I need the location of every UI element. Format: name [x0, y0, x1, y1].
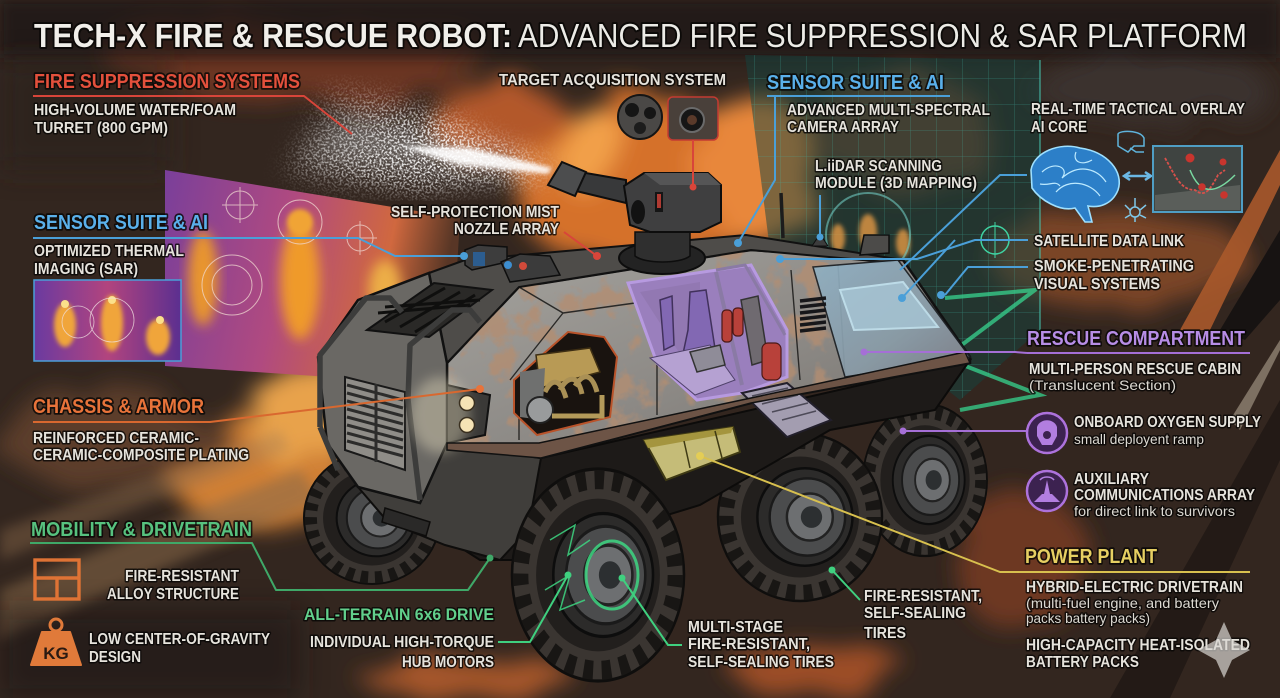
text: multi-stage tires: FIRE-RESISTANT, — [688, 636, 810, 653]
text: comms: COMMUNICATIONS ARRAY — [1074, 487, 1256, 504]
icon: oxygen mask — [1027, 413, 1067, 453]
text: water foam turret: HIGH-VOLUME WATER/FOAM — [34, 102, 236, 119]
vehicle illustration — [304, 162, 987, 681]
callout: multi-stage tires — [618, 574, 834, 671]
battery packs — [644, 427, 740, 480]
callout: fire suppression systems — [33, 71, 352, 137]
text: hybrid drivetrain: HYBRID-ELECTRIC DRIVETRAIN — [1026, 579, 1243, 596]
text: tactical overlay: REAL-TIME TACTICAL OVERLAY — [1031, 101, 1246, 118]
leader line: rescue — [860, 348, 1250, 356]
text: low center of gravity: DESIGN — [89, 649, 141, 666]
text: plating — [33, 430, 249, 464]
label: smoke-penetrating: VISUAL SYSTEMS — [1034, 276, 1160, 293]
heading: mobility: MOBILITY & DRIVETRAIN — [31, 519, 252, 541]
text: comms — [1074, 471, 1256, 519]
windshield — [840, 282, 938, 330]
translucent blue section — [813, 260, 970, 377]
suspension springs — [555, 390, 882, 500]
roof — [429, 235, 903, 363]
text: multi-stage tires: SELF-SEALING TIRES — [688, 654, 834, 671]
text: self-sealing tires: TIRES — [864, 625, 906, 642]
leader line: multi-stage — [618, 574, 682, 645]
callout: self-protection mist — [391, 204, 601, 260]
thermal image inset — [34, 280, 181, 361]
turret base — [619, 232, 705, 274]
label: target acquisition: TARGET ACQUISITION SYSTEM — [499, 72, 726, 89]
text: thermal imaging: IMAGING (SAR) — [34, 261, 138, 278]
text: alloy structure — [107, 568, 239, 603]
heading: power plant: POWER PLANT — [1025, 546, 1157, 568]
callout: mobility and drivetrain — [30, 519, 494, 666]
text: hub motors: HUB MOTORS — [402, 654, 494, 671]
text: comms: AUXILIARY — [1074, 471, 1150, 488]
side armor panel — [447, 250, 970, 458]
icon: alloy frame — [35, 560, 79, 599]
text: plating: REINFORCED CERAMIC- — [33, 430, 199, 447]
tactical map panel — [1153, 146, 1242, 212]
sill band — [447, 352, 970, 458]
label: smoke-penetrating: SMOKE-PENETRATING — [1034, 258, 1194, 275]
wheel: rear right — [863, 404, 987, 556]
leader line: tires — [828, 566, 860, 600]
callout: AI core — [900, 101, 1246, 270]
thermal imaging hologram panel — [165, 170, 460, 385]
roll cage bars — [320, 298, 480, 500]
icon: comms array — [1027, 471, 1067, 511]
heading: fire suppression: FIRE SUPPRESSION SYSTEMS — [34, 71, 300, 93]
text: thermal imaging — [34, 243, 184, 278]
icon: round camera — [618, 95, 662, 139]
leader lines: blue sensors — [776, 240, 1028, 302]
leader line: target — [690, 140, 696, 190]
leader line: thermal — [33, 238, 468, 260]
headlights — [460, 396, 474, 432]
leader line: fire suppression — [33, 96, 352, 134]
leader line: sensor suite — [734, 96, 950, 247]
text: lidar: L.iiDAR SCANNING — [815, 158, 942, 175]
leader line: chassis — [33, 385, 484, 422]
heading: chassis: CHASSIS & ARMOR — [33, 396, 204, 418]
callout: chassis and armor — [33, 385, 484, 464]
text: low center of gravity — [89, 631, 271, 666]
text: battery packs: BATTERY PACKS — [1026, 654, 1139, 671]
spray: water jet from turret — [285, 85, 552, 190]
label: all-terrain: ALL-TERRAIN 6x6 DRIVE — [304, 605, 494, 624]
front face — [318, 273, 447, 503]
text: tactical overlay — [1031, 101, 1246, 136]
roof vent louvres — [367, 283, 492, 337]
text: comms: for direct link to survivors — [1074, 503, 1235, 519]
text: hub motors: INDIVIDUAL HIGH-TORQUE — [310, 634, 494, 651]
text: rescue cabin: (Translucent Section) — [1029, 377, 1176, 393]
heading: sensor suite: SENSOR SUITE & AI — [34, 212, 208, 234]
text: battery packs: HIGH-CAPACITY HEAT-ISOLATED — [1026, 637, 1250, 654]
arrow: brain to map — [1124, 172, 1151, 180]
holographic grid panel right — [745, 55, 1040, 410]
callout: power plant — [696, 452, 1250, 671]
text: camera array — [787, 102, 990, 136]
leader line: power plant — [696, 452, 1250, 572]
wheel: rear left — [304, 452, 440, 584]
text: multi-stage tires: MULTI-STAGE — [688, 619, 783, 636]
wheel: middle — [718, 433, 882, 601]
rust texture — [447, 250, 840, 458]
text: water foam turret: TURRET (800 GPM) — [34, 120, 168, 137]
text: alloy structure: ALLOY STRUCTURE — [107, 586, 239, 603]
wheel: front — [512, 469, 684, 681]
text: thermal imaging: OPTIMIZED THERMAL — [34, 243, 184, 260]
side vent — [800, 298, 826, 331]
title — [34, 17, 1247, 54]
deployment ramp — [742, 383, 831, 437]
leader line: wheel to oxygen — [900, 428, 1026, 434]
leader line: mobility — [30, 543, 494, 590]
underbody — [370, 360, 970, 560]
title: TECH-X FIRE & RESCUE ROBOT: — [34, 17, 512, 54]
text: self-sealing tires — [864, 588, 982, 642]
turret barrel — [548, 162, 626, 203]
text: camera array: CAMERA ARRAY — [787, 119, 900, 136]
front grille — [345, 377, 405, 470]
text: hybrid drivetrain: packs battery packs) — [1026, 610, 1150, 626]
leader line: AI core — [900, 175, 1027, 270]
text: hybrid drivetrain — [1026, 579, 1243, 626]
turret head — [624, 173, 721, 232]
fire extinguishers — [722, 308, 781, 380]
callout: rescue compartment — [860, 328, 1262, 519]
text: tactical overlay: AI CORE — [1031, 119, 1087, 136]
icon: box camera — [668, 97, 718, 140]
heading: rescue compartment: RESCUE COMPARTMENT — [1027, 328, 1245, 350]
text: water foam turret — [34, 102, 236, 137]
icon: network nodes — [1125, 198, 1146, 222]
heading: sensor suite: SENSOR SUITE & AI — [767, 72, 944, 94]
roof sensor units — [465, 234, 889, 282]
text: low center of gravity: LOW CENTER-OF-GRAVITY — [89, 631, 271, 648]
leader line: lidar — [816, 195, 824, 240]
text: multi-stage tires — [688, 619, 834, 671]
rescue cabin interior — [628, 265, 787, 400]
label: mist nozzle array — [391, 204, 560, 238]
text: self-sealing tires: SELF-SEALING — [864, 605, 966, 622]
callout: all-terrain drive — [304, 572, 572, 671]
leader line: hub motors — [498, 572, 572, 642]
text: battery packs — [1026, 637, 1250, 671]
panel seams — [510, 265, 845, 440]
headlight housing — [447, 385, 490, 443]
icon: KG weight: KG — [43, 644, 69, 663]
text: lidar — [815, 158, 977, 192]
label: mist nozzle array: NOZZLE ARRAY — [454, 221, 560, 238]
label: mist nozzle array: SELF-PROTECTION MIST — [391, 204, 559, 221]
text: lidar: MODULE (3D MAPPING) — [815, 175, 977, 192]
icon: KG weight — [31, 619, 81, 665]
text: hub motors — [310, 634, 494, 671]
callout: self-sealing tires — [828, 566, 982, 642]
icon: holographic brain — [1031, 146, 1119, 222]
text: alloy structure: FIRE-RESISTANT — [125, 568, 239, 585]
callout: sensor suite top — [734, 72, 990, 247]
hub motor glow — [545, 525, 638, 610]
label: smoke-penetrating — [1034, 258, 1194, 293]
leader line: mist — [564, 232, 601, 260]
antenna — [781, 193, 783, 238]
text: hybrid drivetrain: (multi-fuel engine, and battery — [1026, 595, 1219, 611]
lower front plate — [358, 443, 541, 560]
headlight glow — [410, 377, 470, 453]
icon: circuit chip — [1118, 131, 1144, 152]
text: oxygen: small deployent ramp — [1074, 431, 1204, 447]
tow bracket — [382, 508, 430, 536]
callout: satellite and smoke-penetrating — [776, 233, 1194, 302]
text: self-sealing tires: FIRE-RESISTANT, — [864, 588, 982, 605]
engine bay cutaway — [514, 332, 617, 435]
text: camera array: ADVANCED MULTI-SPECTRAL — [787, 102, 990, 119]
callout: target acquisition system — [499, 72, 726, 190]
icon: corner sparkle — [1198, 622, 1250, 678]
callout: sensor suite left — [33, 212, 468, 361]
label: satellite data link: SATELLITE DATA LINK — [1034, 233, 1185, 250]
text: oxygen — [1074, 414, 1262, 447]
text: plating: CERAMIC-COMPOSITE PLATING — [33, 447, 249, 464]
text: rescue cabin: MULTI-PERSON RESCUE CABIN — [1029, 361, 1241, 378]
text: rescue cabin — [1029, 361, 1241, 393]
